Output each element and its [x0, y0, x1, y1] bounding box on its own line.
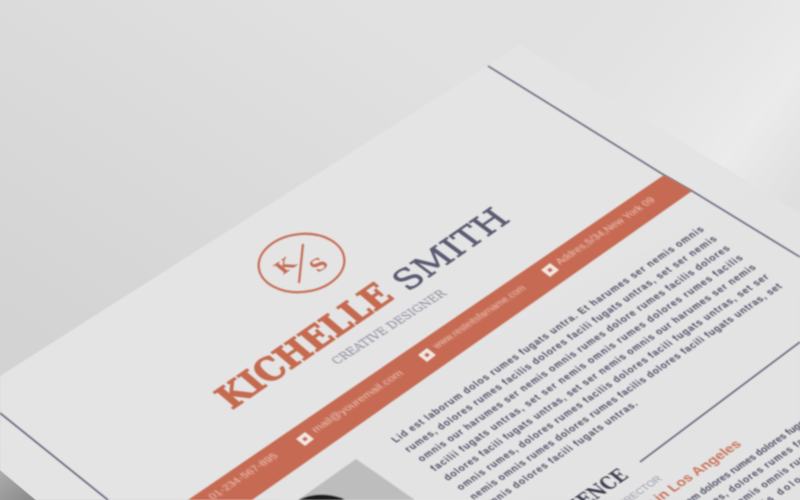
intro paragraph: facilii fugats untras, set ser nemis omnis rumes dolores rumes facilis — [428, 253, 747, 473]
intro paragraph: nemis omnis rumes dolores rumes facilis dolores facili fugats untras, set — [467, 282, 786, 500]
job title: CREATIVE DESIGNER — [329, 287, 450, 367]
icon: mail — [296, 432, 314, 446]
divider line right — [640, 342, 800, 462]
logo monogram K/S: S — [304, 254, 334, 276]
intro paragraph — [389, 225, 786, 500]
hair — [298, 494, 345, 500]
border line top right — [488, 66, 800, 257]
name heading — [206, 203, 519, 416]
intro paragraph: dolores facili fugats untras, set ser nemis omnis our harumes ser nemis — [441, 263, 760, 483]
icon: address — [541, 263, 559, 277]
name heading: KICHELLE — [206, 276, 402, 416]
intro paragraph: Lid est laborum dolos rumes fugats untra. Et harumes ser nemis omnis — [389, 225, 708, 445]
icon: web — [418, 348, 436, 362]
contact band — [188, 175, 692, 500]
border line bottom left — [0, 413, 108, 500]
logo monogram K/S: K — [269, 254, 302, 278]
portrait photo — [298, 459, 415, 500]
mail text: mail@youremail.com — [309, 368, 406, 435]
intro paragraph: rumes, dolores rumes facilis dolores facili fugats untras, set ser nemis — [402, 234, 721, 454]
web text: www.resteitsfarname.com — [429, 283, 529, 352]
address text: Addres,5/34,New York 09 — [553, 195, 658, 267]
name heading: SMITH — [385, 203, 519, 297]
intro paragraph: omnis rumes, dolores rumes facilis dolores facili fugats untras, set ser — [454, 272, 772, 492]
logo monogram K/S — [256, 230, 347, 296]
intro paragraph: omnis our harumes ser nemis omnis rumes dolore rumes facilis dolores — [415, 244, 734, 464]
underlying shadow corner — [0, 470, 36, 500]
